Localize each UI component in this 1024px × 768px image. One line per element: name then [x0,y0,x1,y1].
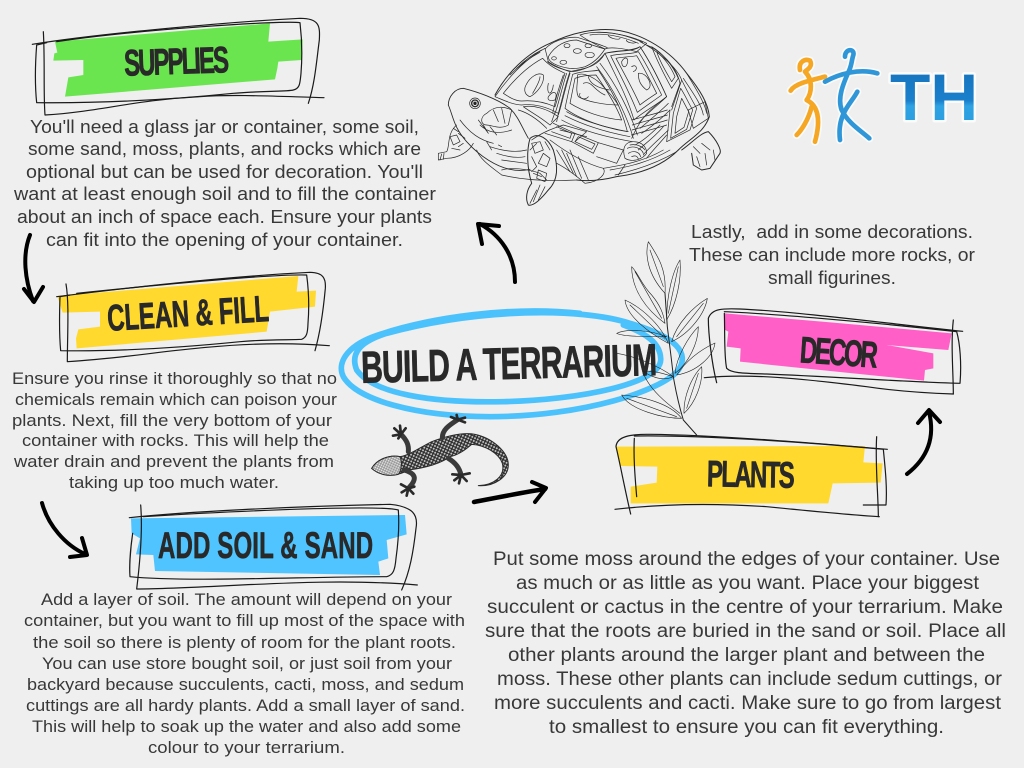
illustration: leafy branch [617,242,715,435]
text: decorations instructions [689,221,975,288]
text: plants instructions: Put some moss around the edges of your container. Use [493,549,1000,570]
blue hand-drawn ellipse [341,311,682,417]
text: add soil instructions: cuttings are all hardy plants. Add a small layer of sand. [26,697,465,715]
heading: add soil and sand: ADD SOIL & SAND [158,525,373,566]
text: decorations instructions: small figurines. [768,267,896,288]
arrow: to plants [474,482,546,502]
text: decorations instructions: These can include more rocks, or [689,244,975,265]
text: add soil instructions: Add a layer of soil. The amount will depend on your [41,591,453,609]
illustration: gecko [372,415,508,496]
gecko head [372,456,401,475]
title: build a terrarium [341,311,682,417]
heading: supplies: SUPPLIES [123,39,230,84]
title text: BUILD A TERRARIUM [360,335,658,393]
text: supplies instructions: You'll need a glass jar or container, some soil, [30,116,419,137]
panel: clean and fill [12,272,338,492]
text: plants instructions: succulent or cactus in the centre of your terrarium. Make [487,597,1003,618]
panel: decor heading [704,309,963,394]
panel: plants [485,434,1006,738]
text: clean and fill instructions: Ensure you rinse it thoroughly so that no [12,370,337,388]
text: add soil instructions: This will help to soak up the water and also add some [32,718,461,736]
text: plants instructions: more succulents and cacti. Make sure to go from largest [494,693,1002,714]
text: clean and fill instructions: water drain and prevent the plants from [13,453,334,471]
text: supplies instructions: optional but can be used for decoration. You'll [26,161,423,182]
text: plants instructions: as much or as little as you want. Place your biggest [516,573,980,594]
text: plants instructions [485,549,1006,738]
panel: add soil and sand [24,504,465,757]
text: plants instructions: moss. These other plants can include sedum cuttings, or [497,669,1003,690]
heading: plants: PLANTS [707,453,795,496]
heading: plants [615,434,887,517]
text: add soil instructions: backyard because succulents, cacti, moss, and sedum [27,676,464,694]
arrow: to turtle [478,224,515,282]
text: decorations instructions: Lastly, add in some decorations. [691,221,973,242]
text: clean and fill instructions: taking up too much water. [69,474,279,492]
text: clean and fill instructions: container with rocks. This will help the [22,432,329,450]
gecko toes [393,415,470,496]
arrow: supplies to clean and fill [24,235,43,302]
heading: supplies [32,18,324,115]
panel: supplies [13,18,436,250]
text: supplies instructions: want at least enough soil and to fill the container [13,183,436,204]
text: supplies instructions: about an inch of space each. Ensure your plants [17,206,432,227]
heading: clean and fill: CLEAN & FILL [106,288,270,339]
logo letters: TH [890,60,978,134]
text: add soil instructions: container, but you want to fill up most of the space with [24,612,465,630]
right and lower shell contours [640,42,682,110]
text: plants instructions: other plants around the larger plant and between the [508,645,985,666]
heading: add soil and sand [129,504,417,590]
text: clean and fill instructions: chemicals remain which can poison your [15,391,338,409]
logo: TH [791,50,978,142]
heading: clean and fill [57,272,329,362]
text: add soil instructions: colour to your terrarium. [148,739,345,757]
text: plants instructions: to smallest to ensure you can fit everything. [549,717,944,738]
illustration: turtle [438,29,720,205]
gecko legs [401,420,461,488]
arrow: plants to decor [907,410,940,474]
panel: decor heading: DECOR [799,329,879,376]
text: supplies instructions [13,116,436,250]
text: add soil instructions [24,591,465,757]
text: clean and fill instructions [12,370,338,492]
arrow: clean and fill to add soil [42,503,87,557]
text: supplies instructions: can fit into the opening of your container. [46,229,403,250]
text: add soil instructions: the soil so there is plenty of room for the plant roots. [33,634,456,652]
icon: orange and blue figures [791,50,877,142]
text: plants instructions: sure that the roots are buried in the sand or soil. Place all [485,621,1006,642]
text: clean and fill instructions: plants. Next, fill the very bottom of your [12,412,333,430]
text: add soil instructions: You can use store bought soil, or just soil from your [42,655,453,673]
text: supplies instructions: some sand, moss, plants, and rocks which are [28,138,421,159]
